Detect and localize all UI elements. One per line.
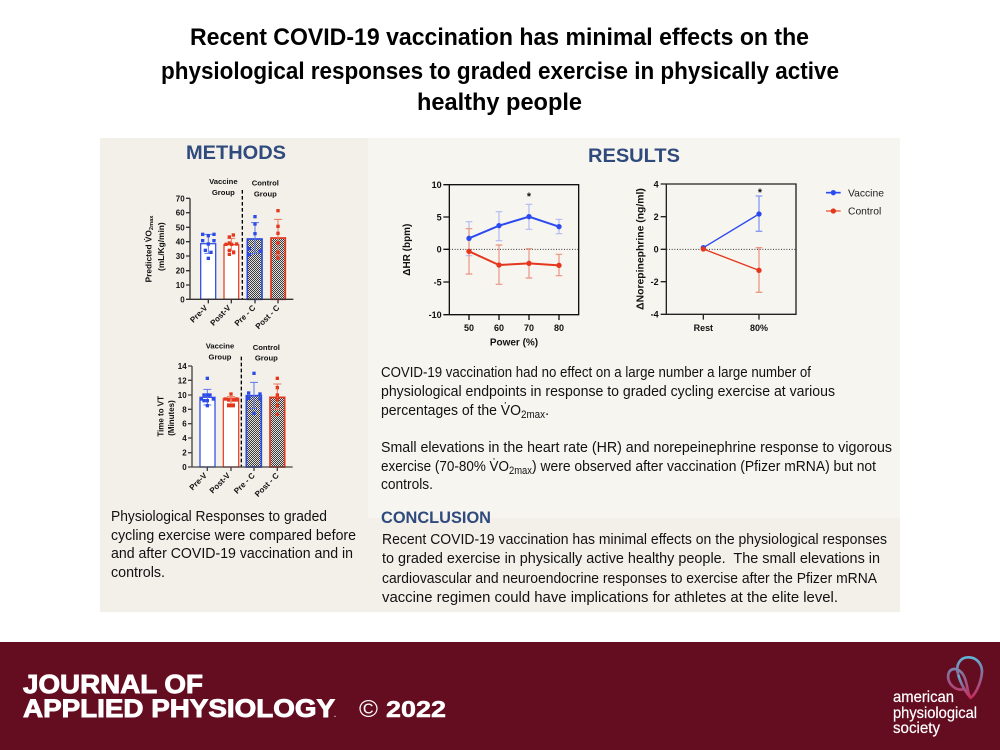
legend	[826, 188, 884, 217]
line chart: change in heart rate: 80	[554, 323, 564, 333]
copyright: 2022	[386, 696, 446, 722]
line chart: change in norepinephrine: 4	[654, 179, 659, 189]
journal name: .	[334, 712, 336, 719]
title	[161, 24, 839, 116]
line chart: change in heart rate	[402, 180, 579, 349]
text: conclusion: Recent COVID-19 vaccination has minimal effects on the physiological responses	[382, 531, 887, 548]
panel: methods background	[100, 138, 368, 612]
line chart: change in norepinephrine: *	[758, 187, 763, 199]
logo: american physiological society	[893, 657, 982, 737]
text: results finding two: exercise (70-80% V̇O	[381, 458, 509, 475]
bar chart: time to VT: Post - C	[253, 471, 281, 499]
line chart: change in norepinephrine: -4	[651, 310, 659, 320]
legend: Vaccine	[848, 188, 884, 199]
text: results finding two: controls.	[381, 476, 433, 493]
bar chart: time to VT: 8	[182, 405, 187, 414]
text: results finding one: percentages of the V̇O	[381, 402, 521, 419]
text: methods description	[111, 508, 356, 581]
bar chart: predicted VO2max: 40	[176, 238, 185, 247]
line chart: change in norepinephrine: ΔNorepinephrine (ng/ml)	[636, 188, 647, 310]
text: conclusion	[382, 531, 887, 606]
text: results finding one: .	[545, 402, 549, 419]
bar chart: predicted VO2max	[143, 177, 293, 331]
bar chart: time to VT: 6	[182, 420, 187, 429]
line chart: change in norepinephrine: Rest	[694, 323, 713, 333]
heading: conclusion: CONCLUSION	[381, 508, 491, 527]
bar chart: predicted VO2max: Post-V	[208, 303, 233, 328]
bar chart: time to VT: Post-V	[208, 471, 233, 495]
bar chart: predicted VO2max: Pre-V	[188, 303, 210, 324]
panel: conclusion background	[368, 518, 900, 612]
journal name: JOURNAL OF	[23, 669, 203, 699]
line chart: change in norepinephrine	[636, 179, 796, 333]
bar chart: time to VT	[157, 342, 293, 499]
text: conclusion: to graded exercise in physically active healthy people. The small elevations in	[382, 550, 880, 567]
text: results finding one: 2max	[521, 409, 545, 421]
journal name	[23, 669, 336, 723]
bar chart: time to VT: Time to VT	[157, 396, 166, 437]
bar chart: predicted VO2max: 0	[180, 295, 185, 304]
footer band	[0, 642, 1000, 750]
line chart: change in heart rate: Power (%)	[490, 338, 538, 349]
logo: american physiological society: society	[893, 720, 940, 737]
text: methods description: and after COVID-19 vaccination and in	[111, 545, 353, 562]
text: results finding two: Small elevations in the heart rate (HR) and norepeinephrine response to vigorous	[381, 439, 892, 456]
text: results finding two: 2max	[509, 465, 532, 477]
bar chart: predicted VO2max: 2max	[149, 215, 155, 230]
logo: american physiological society: american	[893, 689, 954, 706]
line chart: change in heart rate: -10	[429, 310, 442, 320]
copyright: ©	[359, 696, 378, 723]
bar chart: time to VT: (Minutes)	[167, 400, 176, 436]
line chart: change in heart rate: 60	[494, 323, 504, 333]
line chart: change in heart rate: ΔHR (bpm)	[402, 224, 413, 276]
bar chart: predicted VO2max: 30	[176, 252, 185, 261]
title: Recent COVID-19 vaccination has minimal effects on the	[190, 24, 809, 51]
text: results finding two	[381, 439, 892, 493]
bar chart: time to VT: 2	[182, 449, 187, 458]
bar chart: predicted VO2max: (mL/Kg/min)	[156, 222, 166, 271]
line chart: change in norepinephrine: 80%	[750, 323, 768, 333]
line chart: change in norepinephrine: 0	[654, 245, 659, 255]
bar chart: time to VT: Pre-V	[188, 471, 209, 492]
line chart: change in norepinephrine: -2	[651, 277, 659, 287]
bar chart: time to VT: Group	[255, 354, 278, 363]
legend: Control	[848, 206, 881, 217]
bar chart: predicted VO2max: 60	[176, 209, 185, 218]
bar chart: time to VT: Group	[209, 352, 232, 361]
heading: results: RESULTS	[588, 146, 680, 167]
logo: american physiological society: physiological	[893, 705, 977, 722]
text: results finding one: physiological endpoints in response to graded cycling exercise at various	[381, 383, 835, 400]
text: conclusion: cardiovascular and neuroendocrine responses to exercise after the Pfizer mRNA	[382, 570, 877, 587]
bar chart: predicted VO2max: Group	[212, 188, 235, 197]
text: results finding one: COVID-19 vaccination had no effect on a large number a large number of	[381, 364, 812, 381]
text: results finding two: ) were observed after vaccination (Pfizer mRNA) but not	[532, 458, 877, 475]
bar chart: time to VT: 14	[178, 362, 187, 371]
bar chart: time to VT: 0	[182, 463, 187, 472]
bar chart: time to VT: 12	[178, 376, 187, 385]
title: physiological responses to graded exercise in physically active	[161, 58, 839, 85]
bar chart: predicted VO2max: Post - C	[254, 303, 282, 331]
bar chart: time to VT: Vaccine	[206, 342, 234, 351]
line chart: change in heart rate: 10	[432, 180, 442, 190]
line chart: change in heart rate: 70	[524, 323, 534, 333]
text: conclusion: vaccine regimen could have implications for athletes at the elite level.	[382, 589, 838, 606]
line chart: change in heart rate: -5	[434, 277, 442, 287]
bar chart: predicted VO2max: 50	[176, 223, 185, 232]
bar chart: predicted VO2max: 20	[176, 267, 185, 276]
text: methods description: Physiological Responses to graded	[111, 508, 327, 525]
bar chart: predicted VO2max: Predicted V̇O	[143, 230, 153, 282]
bar chart: predicted VO2max: Group	[254, 189, 277, 198]
bar chart: predicted VO2max: 70	[176, 194, 185, 203]
line chart: change in heart rate: 50	[464, 323, 474, 333]
line chart: change in heart rate: *	[527, 191, 532, 203]
journal name: APPLIED PHYSIOLOGY	[23, 695, 335, 723]
title: healthy people	[417, 89, 582, 116]
bar chart: time to VT: 4	[182, 434, 187, 443]
line chart: change in heart rate: 5	[437, 212, 442, 222]
heading: methods: METHODS	[186, 143, 286, 164]
bar chart: predicted VO2max: Control	[252, 178, 279, 187]
bar chart: time to VT: Pre - C	[232, 471, 257, 496]
bar chart: time to VT: Control	[253, 343, 280, 352]
panel: results background	[368, 138, 900, 518]
bar chart: predicted VO2max: 10	[176, 281, 185, 290]
text: results finding one	[381, 364, 835, 421]
line chart: change in norepinephrine: 2	[654, 212, 659, 222]
copyright	[359, 696, 446, 723]
bar chart: time to VT: 10	[178, 391, 187, 400]
text: methods description: controls.	[111, 564, 165, 581]
text: methods description: cycling exercise were compared before	[111, 527, 356, 544]
bar chart: predicted VO2max: Pre - C	[233, 303, 258, 328]
bar chart: predicted VO2max: Vaccine	[209, 177, 238, 186]
line chart: change in heart rate: 0	[437, 245, 442, 255]
